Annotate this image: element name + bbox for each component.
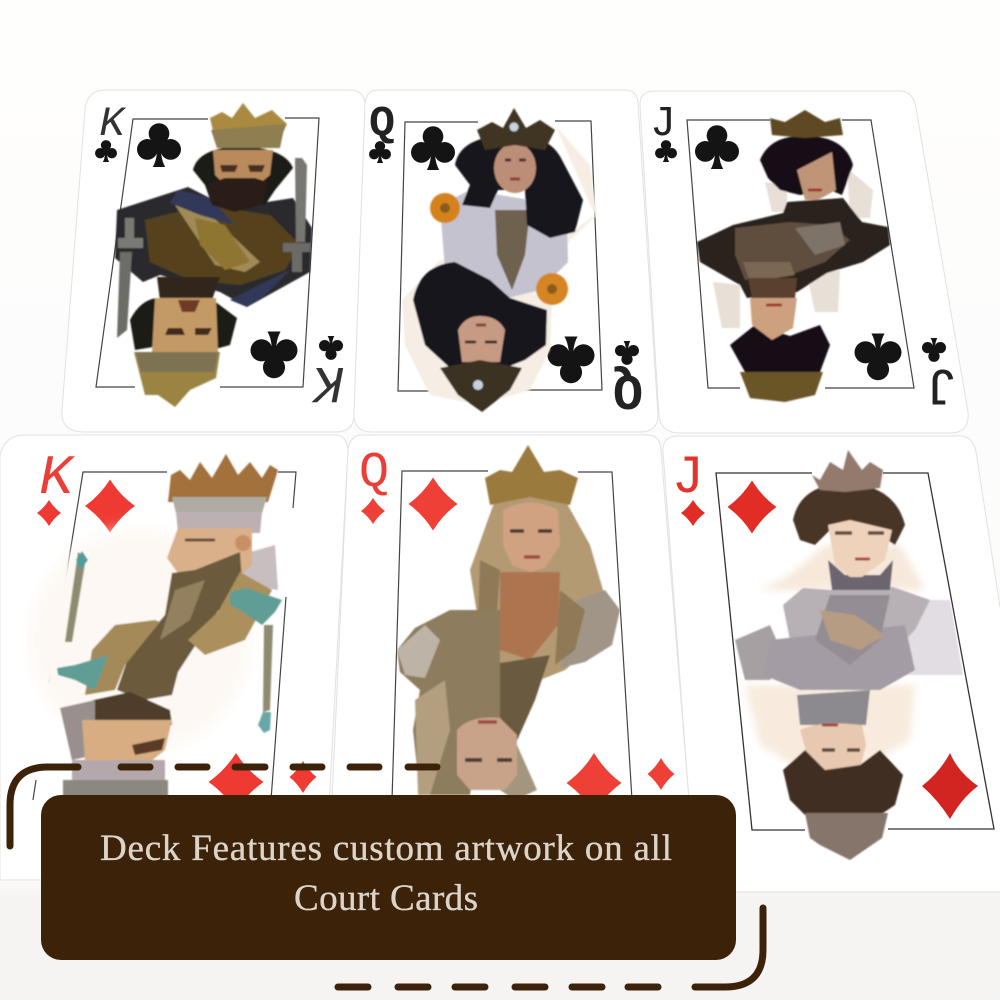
- caption text: [100, 828, 672, 919]
- card: jack of diamonds: [663, 436, 1000, 892]
- index J: J: [672, 448, 704, 509]
- index Q: Q: [369, 99, 395, 148]
- dashed frame: top left: [10, 767, 437, 846]
- dashed frame: bottom right: [338, 908, 763, 987]
- suit marks: [369, 126, 639, 383]
- index J: J: [650, 99, 676, 148]
- index K: K: [39, 446, 75, 510]
- card: jack of clubs: [640, 91, 968, 433]
- caption text: Court Cards: [294, 878, 478, 919]
- suit marks: [37, 480, 316, 811]
- index Q: Q: [359, 445, 389, 502]
- portrait queen clubs: [402, 108, 597, 412]
- suit marks: [361, 478, 674, 813]
- suit marks: [95, 123, 343, 378]
- card: king of clubs: K: [311, 352, 345, 411]
- portrait king diamonds: [30, 454, 282, 797]
- suit marks: [655, 125, 946, 380]
- portrait queen diamonds: [397, 445, 620, 800]
- portrait jack clubs: [697, 110, 890, 402]
- caption panel: [41, 795, 736, 960]
- card: queen of clubs: [354, 90, 658, 432]
- card: queen of clubs: Q: [613, 360, 643, 417]
- caption text: Deck Features custom artwork on all: [100, 828, 672, 869]
- card: queen of diamonds: [330, 435, 692, 880]
- index K: K: [99, 100, 126, 148]
- portrait jack diamonds: [735, 450, 963, 860]
- card: king of clubs: [62, 90, 365, 432]
- portrait king clubs: [115, 103, 312, 407]
- card: jack of clubs: J: [926, 354, 958, 413]
- suit marks: [681, 480, 776, 534]
- card: king of diamonds: [0, 435, 348, 880]
